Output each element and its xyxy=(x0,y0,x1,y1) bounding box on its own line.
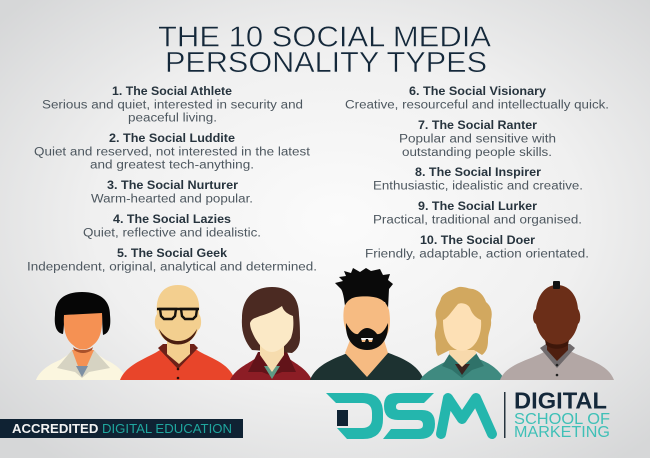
right column: personality types 6 to 10 xyxy=(345,86,609,260)
title: PERSONALITY TYPES xyxy=(165,47,487,79)
logo wordmark: DIGITAL xyxy=(514,388,607,414)
banner: accredited digital education xyxy=(0,419,243,438)
type 8: 8. The Social Inspirer xyxy=(415,167,542,179)
person 2: bald with glasses and red shirt xyxy=(120,285,235,380)
logo square xyxy=(337,410,348,426)
type 10 xyxy=(365,235,589,260)
type 5 xyxy=(27,248,317,274)
person 3: long brown hair xyxy=(230,287,312,380)
logo mark: DSM letters xyxy=(326,393,492,439)
person 1: black bob hair xyxy=(36,292,128,380)
logo wordmark xyxy=(514,388,610,441)
type 1: Serious and quiet, interested in security and xyxy=(42,100,303,112)
beard xyxy=(346,323,388,350)
type 2: Quiet and reserved, not interested in the latest xyxy=(34,146,311,158)
type 3 xyxy=(91,180,253,206)
type 4: 4. The Social Lazies xyxy=(113,214,231,226)
logo: Digital School of Marketing xyxy=(326,388,610,441)
title: THE 10 SOCIAL MEDIA xyxy=(158,22,492,54)
type 4 xyxy=(83,214,261,240)
letter D xyxy=(326,393,383,439)
letter S xyxy=(383,393,435,439)
type 3: Warm-hearted and popular. xyxy=(91,194,253,206)
letter M xyxy=(441,398,492,434)
person 4: spiky hair and beard xyxy=(310,268,424,380)
type 1: 1. The Social Athlete xyxy=(112,86,232,98)
type 6 xyxy=(345,86,609,112)
type 4: Quiet, reflective and idealistic. xyxy=(83,228,261,240)
type 5: 5. The Social Geek xyxy=(117,248,228,260)
type 7: outstanding people skills. xyxy=(402,147,552,159)
face xyxy=(343,296,390,338)
person 5: wavy blonde hair xyxy=(420,287,505,380)
logo wordmark: MARKETING xyxy=(514,424,610,441)
type 9: Practical, traditional and organised. xyxy=(373,214,582,226)
person 6: dark skin with mohawk xyxy=(500,281,614,380)
title xyxy=(158,22,492,79)
glasses xyxy=(157,309,199,319)
type 7: 7. The Social Ranter xyxy=(418,120,538,132)
type 8: Enthusiastic, idealistic and creative. xyxy=(373,180,583,192)
type 5: Independent, original, analytical and determined. xyxy=(27,262,317,274)
type 9 xyxy=(373,201,582,226)
left column: personality types 1 to 5 xyxy=(27,86,317,274)
people illustration row xyxy=(36,268,614,380)
type 2 xyxy=(34,133,311,172)
hair xyxy=(335,268,393,309)
logo wordmark: SCHOOL OF xyxy=(514,411,610,428)
type 1: peaceful living. xyxy=(128,112,217,124)
type 10: Friendly, adaptable, action orientated. xyxy=(365,248,589,260)
type 7: Popular and sensitive with xyxy=(399,134,556,146)
type 3: 3. The Social Nurturer xyxy=(107,180,239,192)
banner: accredited digital education: ACCREDITED DIGITAL EDUCATION xyxy=(12,422,232,436)
type 2: and greatest tech-anything. xyxy=(90,160,254,172)
logo divider xyxy=(504,392,506,438)
type 6: 6. The Social Visionary xyxy=(409,86,547,98)
type 6: Creative, resourceful and intellectually quick. xyxy=(345,100,609,112)
type 2: 2. The Social Luddite xyxy=(109,133,235,145)
type 8 xyxy=(373,167,583,192)
type 10: 10. The Social Doer xyxy=(420,235,536,247)
type 7 xyxy=(399,120,556,159)
type 9: 9. The Social Lurker xyxy=(418,201,538,213)
type 1 xyxy=(42,86,303,124)
